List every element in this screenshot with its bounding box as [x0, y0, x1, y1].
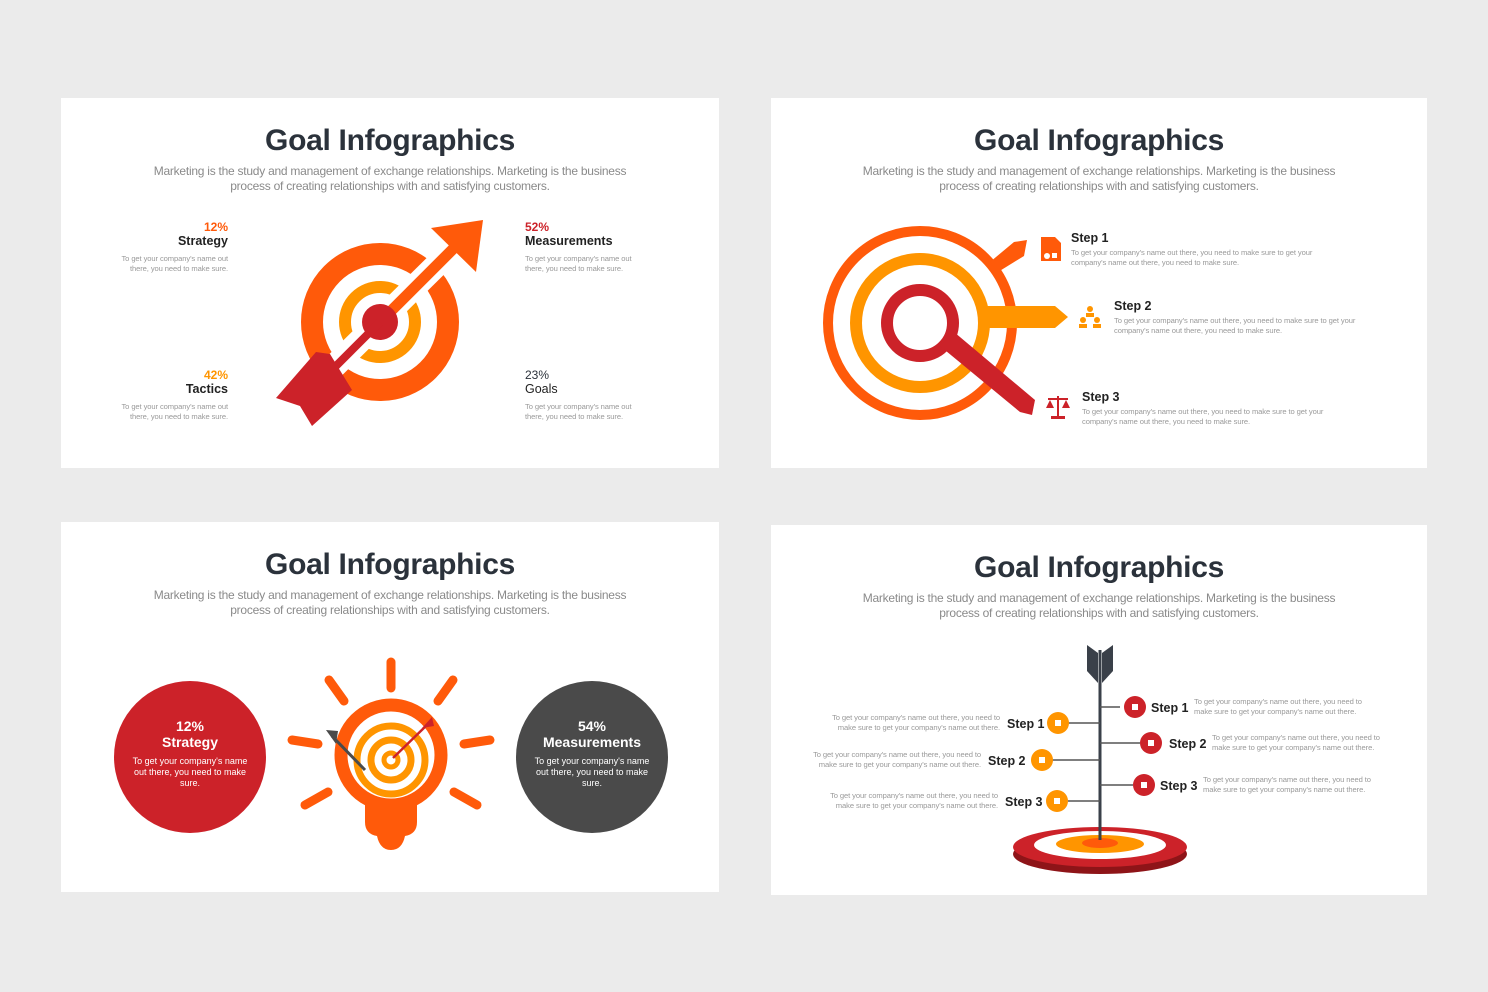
panel: bottom-right: make sure to get your company's name out there.	[1203, 784, 1365, 794]
chart: target with arrow	[276, 220, 483, 426]
subtitle: Marketing is the study and management of exchange relationships. Marketing is the business	[154, 164, 626, 178]
subtitle: Marketing is the study and management of exchange relationships. Marketing is the business	[154, 588, 626, 602]
panel: bottom-right: To get your company's name out there, you need to	[1212, 733, 1380, 742]
text: right step 2: Step 2	[1169, 737, 1207, 751]
panel: bottom-right: To get your company's name out there, you need to	[830, 791, 998, 800]
panel: bottom-right: To get your company's name out there, you need to	[1203, 775, 1371, 784]
text: goals: Goals	[525, 382, 558, 396]
title: Goal Infographics	[974, 551, 1224, 584]
text: measurements: Measurements	[525, 234, 613, 248]
text: step 1: To get your company's name out there, you need to make sure to get your	[1071, 248, 1312, 257]
text: goals: there, you need to make sure.	[525, 412, 623, 420]
text: strategy circle: 12%	[176, 718, 204, 734]
text: measurements: 52%	[525, 220, 549, 234]
subtitle: process of creating relationships with and satisfying customers.	[230, 603, 550, 617]
text: strategy: Strategy	[178, 234, 228, 248]
chart: circles and bulb	[114, 658, 668, 850]
subtitle	[863, 164, 1336, 193]
text: step 2: To get your company's name out there, you need to make sure to get your	[1114, 316, 1355, 325]
text: measurements: there, you need to make sure.	[525, 264, 623, 272]
text: strategy circle	[132, 718, 247, 788]
text: step 3: company's name out there, you need to make sure.	[1082, 416, 1250, 426]
text: step 2	[1114, 299, 1356, 334]
subtitle: process of creating relationships with and satisfying customers.	[939, 179, 1259, 193]
panel: top-right	[771, 98, 1427, 468]
text: tactics: 42%	[204, 368, 228, 382]
text: tactics: To get your company's name out	[121, 402, 228, 411]
text: strategy circle: To get your company's name out there, you need to make sure.	[133, 756, 247, 788]
icon: step 3 scales	[1046, 396, 1070, 419]
subtitle	[863, 591, 1336, 620]
panel: bottom-right: make sure to get your company's name out there.	[819, 760, 981, 768]
panel: bottom-right: make sure to get your company's name out there.	[836, 800, 998, 810]
text: step 1	[1071, 231, 1312, 266]
text: step 3	[1082, 390, 1324, 426]
text: goals: To get your company's name out	[525, 402, 632, 411]
title: Goal Infographics	[265, 124, 515, 157]
text: measurements circle: Measurements	[543, 734, 641, 750]
chart: arrow timeline with target	[1013, 645, 1187, 874]
text: measurements circle	[534, 718, 649, 788]
subtitle: process of creating relationships with and satisfying customers.	[939, 606, 1259, 620]
text: goals: 23%	[525, 368, 549, 382]
panel: bottom-right: make sure to get your company's name out there.	[1194, 706, 1356, 716]
panel: bottom-right: To get your company's name out there, you need to	[832, 713, 1000, 722]
text: left step 3: Step 3	[1005, 795, 1043, 809]
text: step 3: To get your company's name out there, you need to make sure to get your	[1082, 407, 1323, 416]
subtitle	[154, 588, 626, 617]
text: tactics: there, you need to make sure.	[130, 412, 228, 420]
title: Goal Infographics	[974, 124, 1224, 157]
text: measurements: To get your company's name out	[525, 254, 632, 263]
text: step 1: company's name out there, you need to make sure.	[1071, 258, 1239, 266]
text: measurements	[525, 220, 632, 272]
panel: bottom-right: To get your company's name out there, you need to	[1194, 697, 1362, 706]
text: tactics: Tactics	[186, 382, 228, 396]
text: measurements circle: To get your company's name out there, you need to make sure.	[535, 756, 649, 788]
title: Goal Infographics	[265, 548, 515, 581]
panel: bottom-left	[61, 522, 719, 892]
text: step 2: company's name out there, you need to make sure.	[1114, 326, 1282, 334]
text: left step 2: Step 2	[988, 754, 1026, 768]
icon: step 1 document	[1041, 237, 1061, 261]
subtitle: Marketing is the study and management of exchange relationships. Marketing is the business	[863, 591, 1335, 605]
panel: bottom-right: To get your company's name out there, you need to	[813, 750, 981, 759]
text: step 1: Step 1	[1071, 231, 1109, 245]
text: left step 1: Step 1	[1007, 717, 1045, 731]
text: step 2: Step 2	[1114, 299, 1152, 313]
subtitle: Marketing is the study and management of exchange relationships. Marketing is the business	[863, 164, 1335, 178]
panel: bottom-right	[771, 525, 1427, 895]
text: goals	[525, 368, 632, 420]
text: right step 1: Step 1	[1151, 701, 1189, 715]
icon: step 2 people	[1079, 306, 1101, 328]
text: measurements circle: 54%	[578, 718, 606, 734]
text: strategy	[121, 220, 228, 272]
text: strategy: To get your company's name out	[121, 254, 228, 263]
text: right step 3: Step 3	[1160, 779, 1198, 793]
text: strategy: 12%	[204, 220, 228, 234]
subtitle	[154, 164, 626, 193]
text: strategy circle: Strategy	[162, 734, 218, 750]
panel: bottom-right: make sure to get your company's name out there.	[838, 722, 1000, 732]
text: tactics	[121, 368, 228, 420]
text: strategy: there, you need to make sure.	[130, 264, 228, 272]
panel: top-left	[61, 98, 719, 468]
subtitle: process of creating relationships with and satisfying customers.	[230, 179, 550, 193]
text: step 3: Step 3	[1082, 390, 1120, 404]
chart: target with magnifier	[823, 226, 1068, 420]
panel: bottom-right: make sure to get your company's name out there.	[1212, 742, 1374, 752]
